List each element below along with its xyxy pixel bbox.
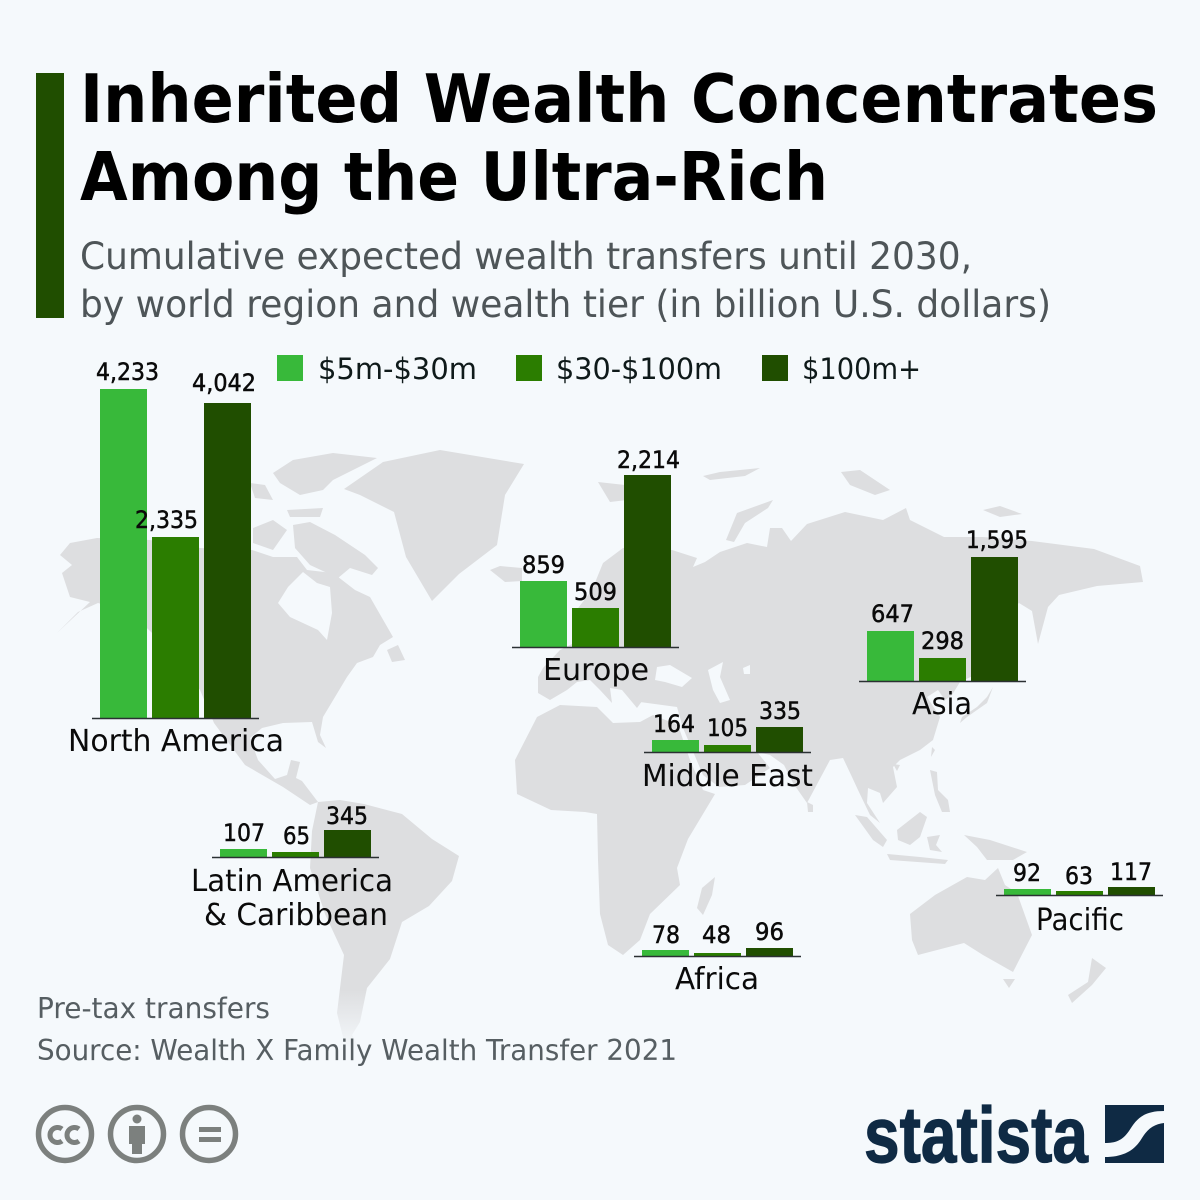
- Greenland: [344, 450, 524, 601]
- subtitle: by world region and wealth tier (in billion U.S. dollars): [80, 283, 1051, 326]
- legend: $5m-$30m: [318, 352, 477, 386]
- Iceland: [490, 566, 522, 582]
- bar group: North America: [68, 358, 284, 759]
- bar group: Latin America and Caribbean: 107: [223, 819, 265, 847]
- bar group: Pacific: 117: [1110, 858, 1152, 886]
- South America: [310, 800, 459, 1052]
- bar group: Middle East: 335: [759, 697, 801, 725]
- world map background: [57, 450, 1143, 1052]
- Black Sea and Caspian: [655, 665, 692, 687]
- Africa: [515, 705, 715, 955]
- bar group: North America: 4,042: [192, 369, 256, 397]
- icon: creative commons licence: [38, 1108, 236, 1160]
- bar group: North America: North America: [68, 724, 284, 759]
- legend: $30-$100m: [556, 352, 722, 386]
- bar group: Pacific: 92: [1013, 859, 1041, 887]
- bar group: Europe: Europe: [543, 653, 649, 688]
- bar group: Africa: Africa: [675, 962, 759, 997]
- North America: [57, 538, 393, 805]
- bar group: Latin America and Caribbean: 65: [283, 822, 310, 850]
- bar group: Asia: [859, 526, 1028, 722]
- legend: [277, 352, 921, 386]
- Japan: [960, 687, 993, 723]
- bar group: North America: 2,335: [135, 506, 198, 534]
- bar group: Africa: 48: [702, 921, 731, 949]
- legend: $100m+: [802, 352, 921, 386]
- Svalbard, Franz Josef, Severnaya, New Siberian islands: [598, 482, 627, 502]
- bar group: Africa: [634, 918, 801, 997]
- bar group: Pacific: 63: [1065, 862, 1093, 890]
- subtitle: Cumulative expected wealth transfers until 2030,: [80, 235, 972, 278]
- bar group: Middle East: 105: [707, 714, 748, 742]
- bar group: North America: 4,233: [96, 358, 159, 386]
- bar group: Middle East: 164: [653, 710, 695, 738]
- Hudson Bay: [278, 572, 332, 640]
- bar group: Europe: 509: [574, 578, 617, 606]
- title accent bar: [36, 73, 64, 318]
- Taiwan and Hainan: [931, 747, 935, 757]
- Australia and New Zealand: [910, 868, 1032, 972]
- Arctic islands: [273, 453, 377, 495]
- bar group: Middle East: [642, 697, 813, 794]
- bar group: Asia: Asia: [912, 687, 972, 722]
- title: Among the Ultra-Rich: [80, 138, 828, 216]
- bar group: Latin America and Caribbean: Latin America: [191, 864, 393, 899]
- bar group: Europe: 2,214: [617, 446, 680, 474]
- bar group: Latin America and Caribbean: 345: [326, 802, 368, 830]
- footnote: Pre-tax transfers: [37, 992, 270, 1025]
- Southeast Asia islands: [930, 770, 950, 812]
- bar group: Africa: 96: [755, 918, 784, 946]
- bar group: Pacific: Pacific: [1036, 903, 1124, 938]
- Eurasia: [538, 508, 1143, 823]
- bar group: Pacific: [996, 858, 1163, 938]
- bar group: Asia: 298: [921, 627, 964, 655]
- bar group: Europe: 859: [522, 551, 565, 579]
- bar group: Latin America and Caribbean: [191, 802, 393, 933]
- logo: statista: statista: [864, 1090, 1089, 1179]
- bar group: Latin America and Caribbean: & Caribbean: [204, 898, 388, 933]
- bar group: Middle East: Middle East: [642, 759, 813, 794]
- bar group: Asia: 1,595: [966, 526, 1028, 554]
- bar group: Asia: 647: [871, 600, 914, 628]
- Madagascar and Sri Lanka: [697, 877, 715, 915]
- bar group: Europe: [512, 446, 680, 688]
- source: Source: Wealth X Family Wealth Transfer 2021: [37, 1034, 677, 1067]
- bar group: Africa: 78: [652, 921, 680, 949]
